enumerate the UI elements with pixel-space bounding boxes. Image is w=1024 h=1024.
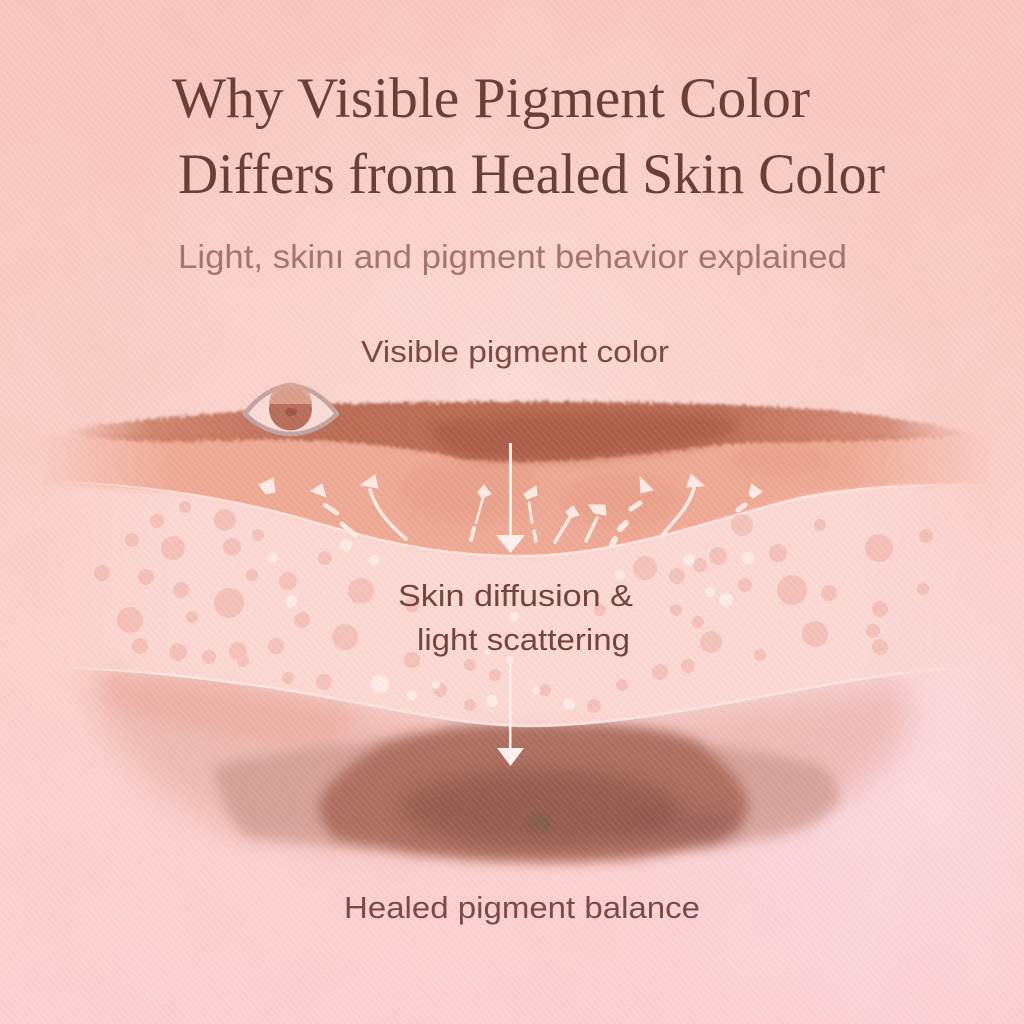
label: skin diffusion and light scattering [398, 578, 633, 657]
arrow 3 [361, 475, 406, 539]
arrow 6 [555, 506, 579, 542]
arrow 4 [471, 485, 491, 540]
illustration: pigment in skin cross-section [0, 382, 1024, 862]
scattering particles: rose [94, 501, 933, 713]
title [172, 67, 885, 206]
lower vertical arrow [497, 662, 524, 766]
scattering particles: white [268, 539, 754, 710]
mottled shade in peach layer [400, 444, 830, 528]
label: skin diffusion and light scattering: Skin diffusion & [398, 578, 633, 613]
arrow 7 [586, 505, 606, 541]
healed pigment halo [90, 672, 909, 849]
title: Why Visible Pigment Color [172, 67, 810, 130]
arrow 10 [738, 484, 762, 510]
arrow 5 [524, 486, 537, 541]
label: visible pigment color: Visible pigment color [361, 334, 669, 369]
arrow 9 [661, 474, 704, 537]
arrow 8 [612, 477, 653, 545]
subtitle: Light, skinı and pigment behavior explained [178, 238, 847, 275]
peach upper skin layer [40, 434, 990, 560]
main vertical arrow [496, 443, 525, 553]
title: Differs from Healed Skin Color [178, 143, 885, 206]
arrow 2 [311, 484, 355, 535]
icon: eye [245, 382, 337, 434]
visible pigment band [62, 402, 975, 461]
upward scatter arrows [259, 474, 762, 545]
label: skin diffusion and light scattering: light scattering [417, 622, 630, 657]
layer boundary lines [60, 482, 985, 726]
healed pigment mass [215, 722, 839, 862]
label: healed pigment balance: Healed pigment balance [344, 890, 700, 925]
translucent skin diffusion layer [81, 485, 926, 726]
arrow 1 [259, 478, 275, 494]
